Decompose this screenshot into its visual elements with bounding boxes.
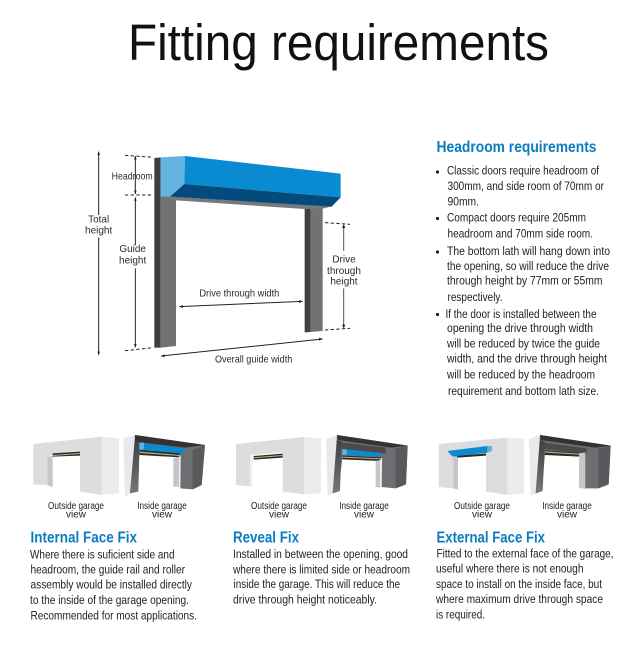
caption: outside garage view: Outside garage [251, 501, 307, 512]
bullet list: will be reduced by twice the guide [446, 336, 600, 350]
description [435, 546, 614, 622]
caption: inside garage view [137, 501, 187, 520]
bullet list [436, 164, 610, 398]
dimension labels: height [330, 277, 358, 288]
dimension labels: through [327, 266, 361, 277]
description: Installed in between the opening, good [233, 547, 408, 561]
dimension lines [97, 152, 350, 357]
bullet list: will be reduced by the headroom [446, 368, 595, 382]
icon: inside garage view [326, 435, 408, 496]
caption: inside garage view: view [557, 510, 578, 520]
bullet list: The bottom lath will hang down into [447, 244, 610, 258]
description: space to install on the inside face, but [436, 577, 602, 591]
caption: outside garage view [251, 501, 307, 520]
description: useful where there is not enough [436, 562, 584, 576]
bullet list: respectively. [448, 290, 502, 304]
description: where maximum drive through space [435, 592, 603, 606]
panel: reveal fix [232, 435, 410, 606]
dimension labels [85, 172, 361, 366]
panel: headroom requirements [436, 139, 610, 398]
description [232, 547, 410, 606]
dimension labels: height [85, 226, 112, 237]
caption: inside garage view [339, 501, 389, 520]
icon: inside garage view [123, 435, 205, 497]
description [30, 548, 197, 622]
description: Recommended for most applications. [30, 608, 197, 622]
caption: outside garage view [454, 501, 510, 520]
heading: Headroom requirements [436, 139, 597, 156]
description: to the inside of the garage opening. [30, 593, 189, 607]
dimension labels: Drive through width [199, 289, 279, 300]
caption: outside garage view: view [66, 510, 87, 520]
heading: Internal Face Fix [30, 530, 137, 546]
caption: inside garage view: view [354, 510, 375, 520]
description: is required. [436, 608, 485, 622]
heading: Reveal Fix [233, 530, 299, 546]
roller box [161, 156, 341, 209]
caption: inside garage view [542, 501, 592, 520]
dimension labels: Guide [119, 244, 146, 255]
bullet list: 90mm. [448, 194, 479, 208]
icon: outside garage view [236, 437, 321, 494]
left guide post [154, 157, 176, 348]
bullet list: opening the drive through width [447, 321, 593, 335]
bullet list: 300mm, and side room of 70mm or [448, 179, 604, 193]
description: where there is limited side or headroom [232, 562, 410, 576]
bullet list: Classic doors require headroom of [447, 164, 599, 178]
dimension labels: Drive [332, 255, 356, 266]
description: Where there is suficient side and [30, 548, 175, 562]
caption: inside garage view: Inside garage [137, 501, 187, 512]
caption: inside garage view: Inside garage [542, 501, 592, 512]
description: drive through height noticeably. [233, 592, 377, 606]
panel: internal face fix [30, 435, 205, 622]
bullet list: If the door is installed between the [446, 307, 597, 321]
description: assembly would be installed directly [30, 578, 193, 592]
description: inside the garage. This will reduce the [234, 577, 400, 591]
icon: inside garage view [529, 435, 611, 496]
bullet list: through height by 77mm or 55mm [447, 274, 602, 288]
caption: outside garage view: view [269, 510, 290, 520]
dimension labels: Total [88, 215, 109, 226]
dimension labels: Headroom [112, 172, 153, 183]
panel: external face fix [435, 435, 614, 622]
caption: outside garage view: view [472, 510, 493, 520]
caption: outside garage view: Outside garage [454, 501, 510, 512]
caption: inside garage view: Inside garage [339, 501, 389, 512]
icon: outside garage view [439, 438, 524, 495]
caption: outside garage view [48, 501, 104, 520]
heading: External Face Fix [436, 530, 545, 546]
title: Fitting requirements [128, 14, 549, 71]
bullet list: the opening, so will reduce the drive [447, 259, 609, 273]
caption: outside garage view: Outside garage [48, 501, 104, 512]
bullet list: headroom and 70mm side room. [448, 226, 593, 240]
icon: outside garage view [33, 437, 119, 495]
dimension labels: height [119, 255, 146, 266]
dimension labels: Overall guide width [215, 355, 292, 366]
description: headroom, the guide rail and roller [30, 562, 185, 576]
right guide post [305, 207, 323, 332]
main door diagram [85, 152, 361, 366]
bullet list: Compact doors require 205mm [447, 210, 586, 224]
bullet list: width, and the drive through height [446, 352, 607, 366]
caption: inside garage view: view [152, 510, 173, 520]
bullet list: requirement and bottom lath size. [448, 384, 599, 398]
